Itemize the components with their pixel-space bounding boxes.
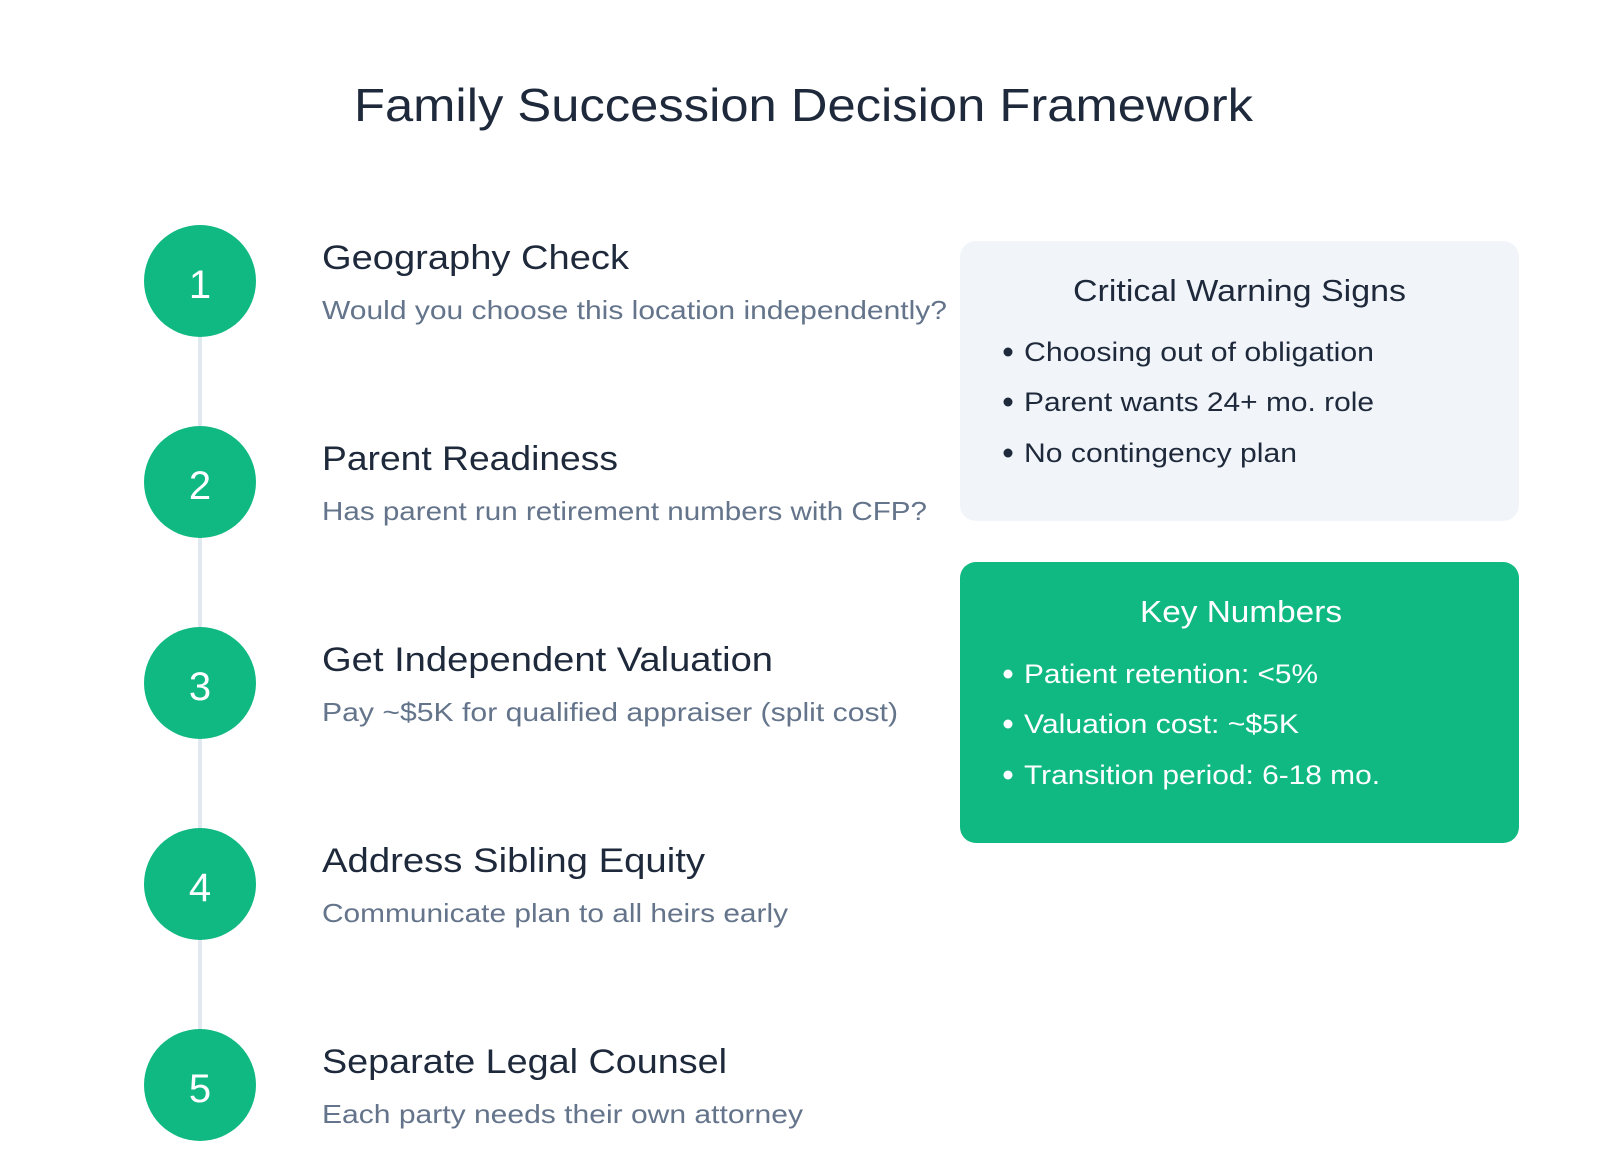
step 4: Address Sibling Equity (322, 842, 705, 880)
step 5: Separate Legal Counsel (322, 1043, 727, 1081)
step 4 (144, 828, 788, 940)
step 4: Communicate plan to all heirs early (322, 898, 788, 928)
panel: key numbers: Transition period: 6-18 mo. (1024, 760, 1380, 790)
title: Family Succession Decision Framework (354, 79, 1254, 131)
step 5: Each party needs their own attorney (322, 1099, 803, 1129)
panel: critical warning signs: No contingency plan (1024, 438, 1297, 468)
step 1: 1 (189, 263, 211, 307)
step 5: 5 (189, 1067, 211, 1111)
panel: key numbers: Patient retention: <5% (1024, 659, 1318, 689)
panel: key numbers (960, 562, 1519, 843)
panel: critical warning signs (960, 241, 1519, 521)
panel: critical warning signs: Parent wants 24+ mo. role (1024, 387, 1374, 417)
step 3: Get Independent Valuation (322, 641, 773, 679)
step 2: Has parent run retirement numbers with CFP? (322, 496, 927, 526)
panel: key numbers: Valuation cost: ~$5K (1024, 709, 1299, 739)
step 2 (144, 426, 927, 538)
step 1: Geography Check (322, 239, 630, 277)
step 3: Pay ~$5K for qualified appraiser (split cost) (322, 697, 898, 727)
step 1 (144, 225, 947, 337)
step 1: Would you choose this location independently? (322, 295, 947, 325)
panel: critical warning signs: Critical Warning Signs (1073, 273, 1406, 308)
step 4: 4 (189, 866, 211, 910)
step 2: 2 (189, 464, 211, 508)
panel: key numbers: Key Numbers (1140, 594, 1342, 629)
step 2: Parent Readiness (322, 440, 618, 478)
step 5 (144, 1029, 803, 1141)
panel: critical warning signs: Choosing out of obligation (1024, 337, 1374, 367)
step 3: 3 (189, 665, 211, 709)
step 3 (144, 627, 898, 739)
